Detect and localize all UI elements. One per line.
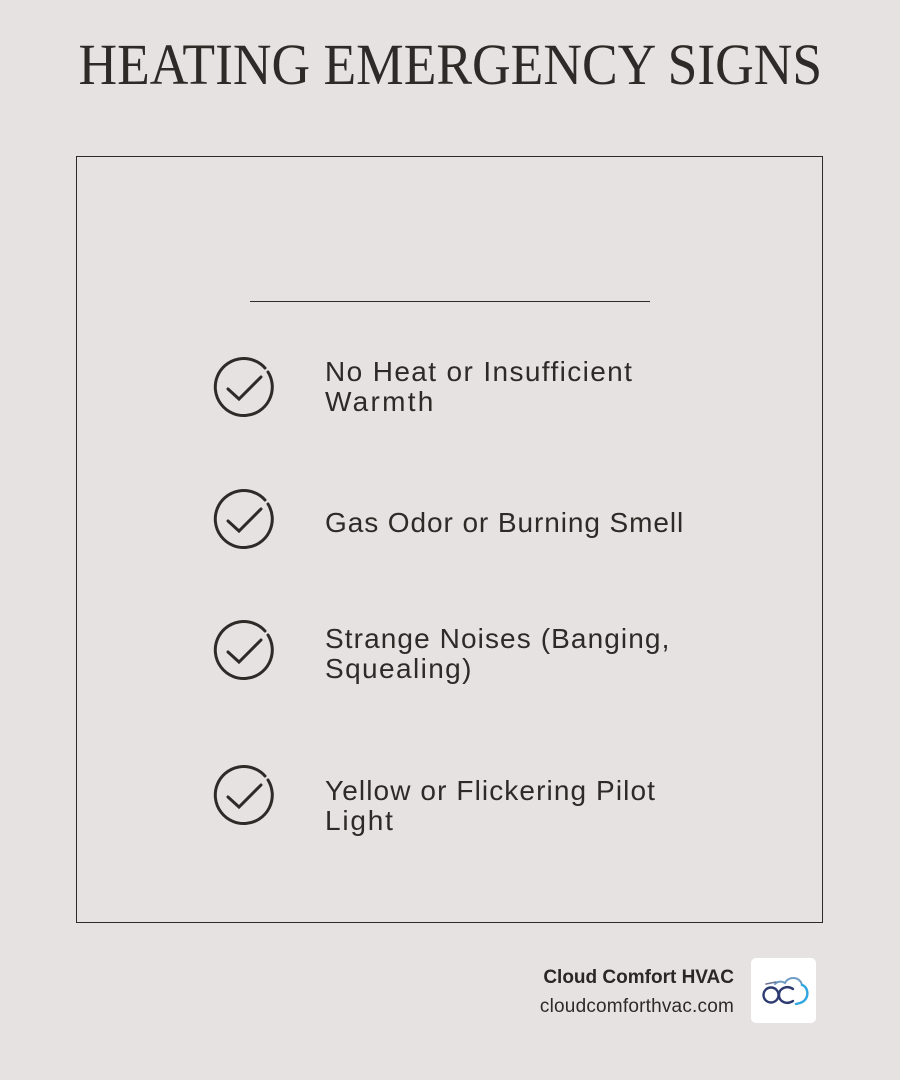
text: strange noises: Strange Noises (Banging, <box>325 623 670 654</box>
brand name: Cloud Comfort HVAC <box>543 967 734 988</box>
website url: cloudcomforthvac.com <box>540 996 734 1017</box>
text: gas odor: Gas Odor or Burning Smell <box>325 507 684 538</box>
panel: signs list frame <box>76 156 823 923</box>
icon: check circle 2 <box>214 489 274 549</box>
text: no heat: Warmth <box>325 386 436 417</box>
icon: company logo <box>751 958 816 1023</box>
text: pilot light: Yellow or Flickering Pilot <box>325 775 656 806</box>
text: pilot light <box>325 775 656 836</box>
text: no heat <box>325 356 633 417</box>
text: strange noises: Squealing) <box>325 653 473 684</box>
title: HEATING EMERGENCY SIGNS <box>78 32 822 97</box>
icon: check circle 3 <box>214 620 274 680</box>
text: pilot light: Light <box>325 805 395 836</box>
text: strange noises <box>325 623 670 684</box>
text: no heat: No Heat or Insufficient <box>325 356 633 387</box>
icon: check circle 4 <box>214 765 274 825</box>
icon: check circle 1 <box>214 357 274 417</box>
